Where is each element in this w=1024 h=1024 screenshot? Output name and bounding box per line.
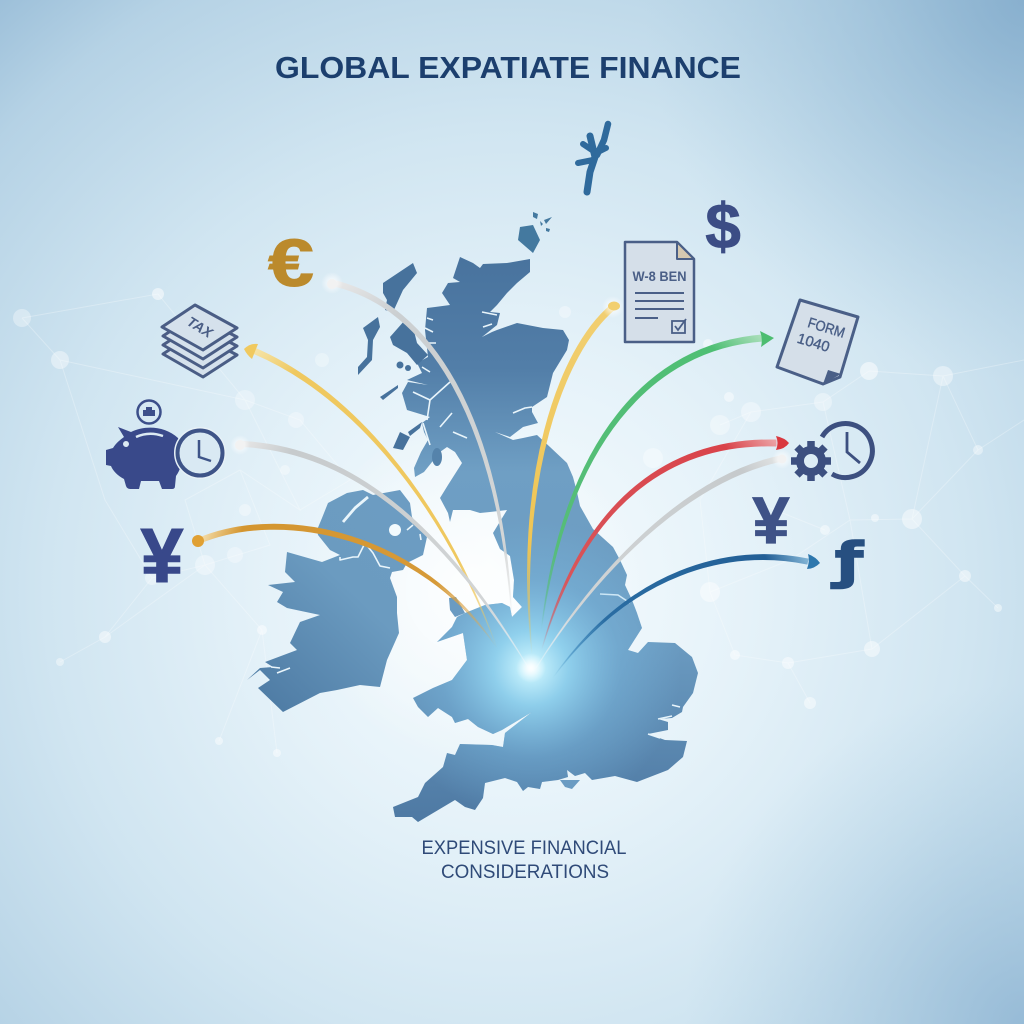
arrow: yellow to tax stack: [244, 344, 497, 648]
icon: W-8 BEN document: [625, 242, 694, 342]
map: Orkney: [518, 212, 552, 253]
icon: tax stack: [162, 305, 237, 377]
icon: form 1040: [777, 300, 858, 384]
caption: EXPENSIVE FINANCIAL: [422, 838, 626, 859]
icon: yen left: ¥: [141, 514, 183, 599]
arrow: grey to gear clock: [536, 449, 792, 668]
icon: florin: ƒ: [830, 531, 864, 590]
map: Lough Neagh: [389, 524, 401, 536]
map: Great Britain: [393, 257, 698, 822]
map: Anglesey and Isle of Wight: [449, 597, 580, 789]
caption: [422, 838, 626, 883]
map: rivers and lochs: [271, 312, 680, 738]
title: GLOBAL EXPATIATE FINANCE: [275, 50, 741, 85]
icon: piggy bank with clock: [106, 400, 224, 489]
map: British Isles: [247, 124, 698, 822]
central glow: [414, 554, 660, 790]
icon: W-8 BEN document: W-8 BEN: [632, 269, 686, 284]
icon: gear and clock: [791, 424, 872, 481]
icon: form 1040: 1040: [795, 331, 831, 356]
network pattern: [13, 288, 1024, 757]
icon: dollar: $: [705, 190, 741, 262]
icon: yen right: ¥: [753, 483, 790, 557]
map: Shetland: [578, 124, 608, 192]
caption: CONSIDERATIONS: [441, 862, 609, 883]
map: Hebrides and west coast islands: [358, 263, 428, 450]
icon: tax stack: TAX: [184, 313, 217, 342]
arrow: blue to florin: [552, 554, 820, 679]
arrow: yellow to W-8 BEN: [528, 296, 624, 655]
icon: euro: €: [268, 225, 314, 300]
arrow: green to form 1040: [541, 331, 774, 632]
arrow: red to gear clock: [541, 436, 789, 652]
icon: form 1040: FORM: [806, 315, 847, 342]
map: Ireland: [247, 490, 427, 712]
arrow: grey to euro: [321, 272, 512, 620]
arrow: grey to piggy bank: [230, 435, 528, 667]
arrow: orange to yen: [192, 524, 497, 648]
